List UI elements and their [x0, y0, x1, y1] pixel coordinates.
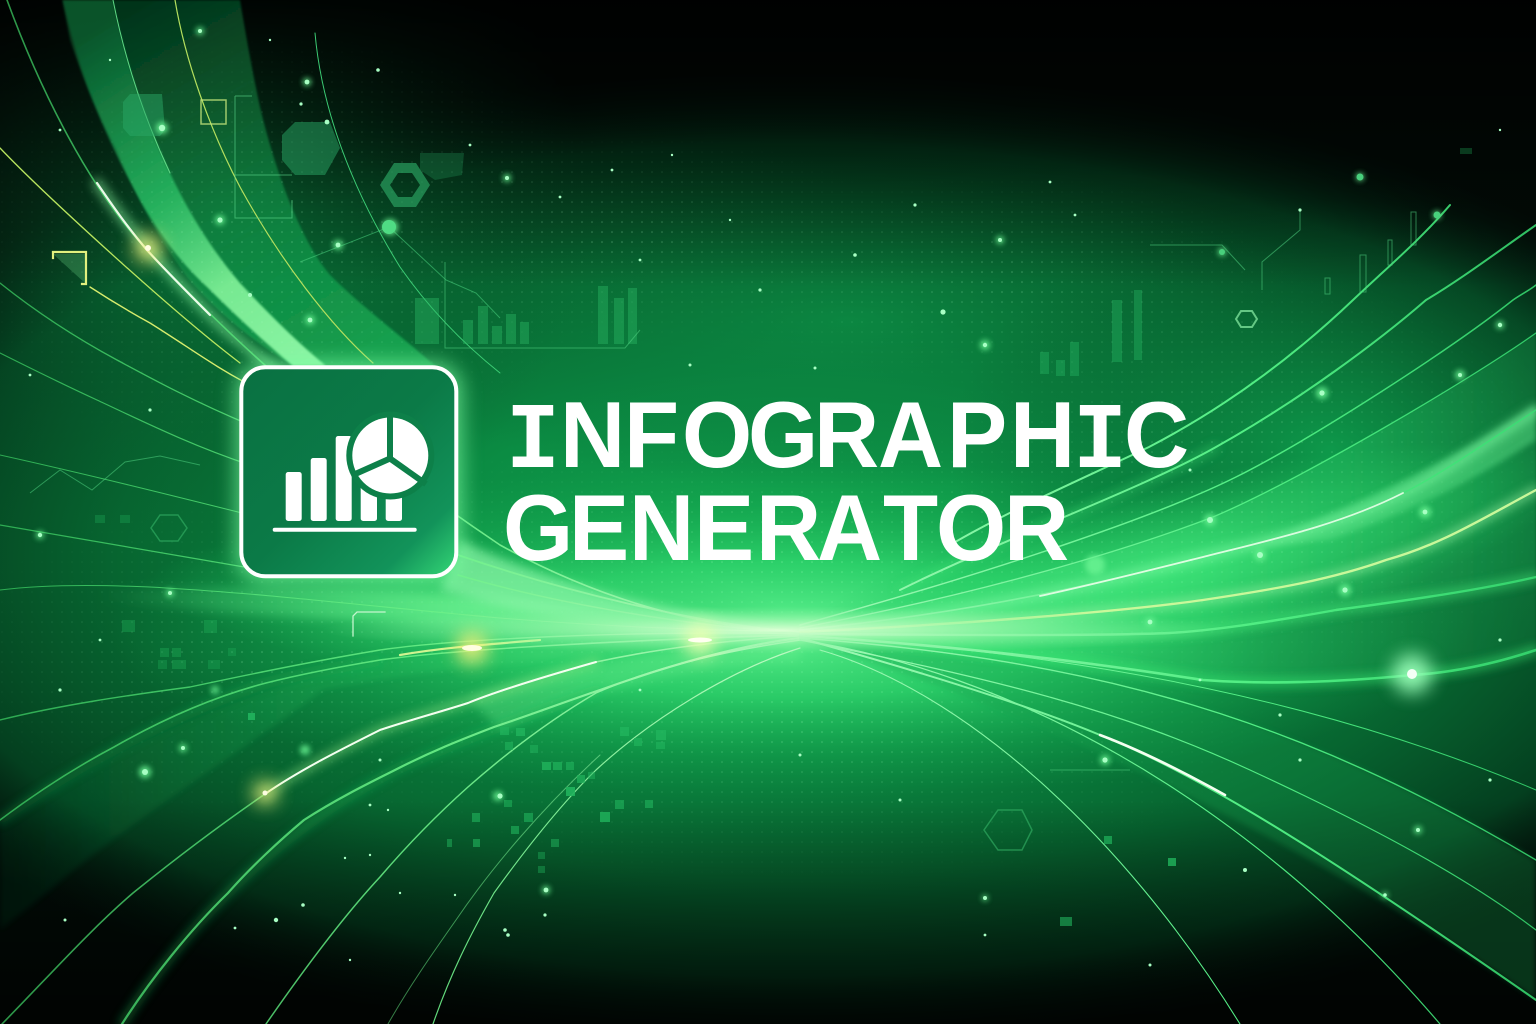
lens flares [134, 234, 1432, 805]
title: GENERATOR [503, 475, 1069, 580]
dot grid texture [2, 62, 1532, 862]
icon: bar chart [273, 436, 417, 532]
soft ribbons: right [800, 333, 1536, 1000]
title [503, 382, 1189, 580]
corner brackets [53, 100, 385, 636]
bright white highlights on streaks [97, 183, 1403, 795]
title: INFOGRAPHIC [506, 382, 1189, 496]
hexagons top-left [123, 94, 464, 180]
card body [241, 367, 456, 576]
faint line charts and circuit lines [30, 210, 1416, 770]
central bright beam [320, 606, 1240, 654]
light streaks: left fan [0, 0, 800, 1024]
hexagon ring [380, 163, 430, 207]
pixel squares [95, 148, 1472, 926]
card glow [236, 362, 462, 582]
upper-left curved bands [62, 0, 440, 370]
light streaks: right fan [800, 205, 1536, 1024]
faint bar chart left [415, 286, 637, 344]
soft ribbons: left [0, 540, 800, 930]
logo icon card [236, 362, 462, 582]
icon: pie chart [346, 412, 434, 500]
faint bar chart right [1040, 290, 1142, 376]
faint data graphics [123, 94, 1257, 850]
